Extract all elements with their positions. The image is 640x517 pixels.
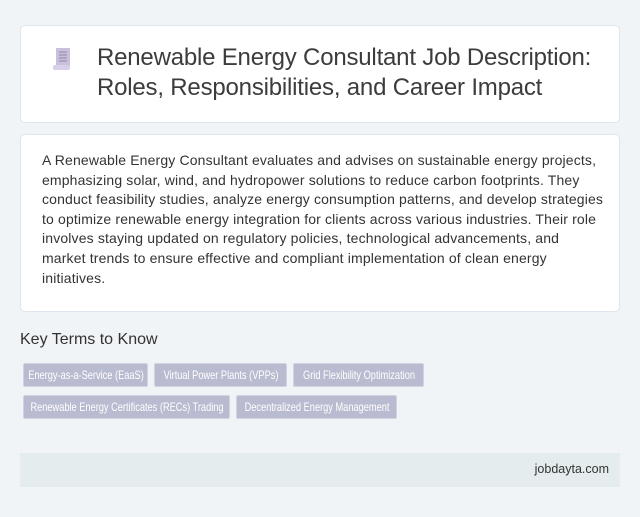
text: Grid Flexibility Optimization	[303, 368, 414, 382]
title: Renewable Energy Consultant Job Description:	[97, 44, 591, 71]
text: Decentralized Energy Management	[244, 400, 389, 414]
footer: jobdayta.com	[535, 462, 609, 476]
text: Renewable Energy Certificates (RECs) Trading	[30, 400, 223, 414]
heading: key terms: Key Terms to Know	[20, 331, 158, 348]
icon: document	[53, 48, 70, 70]
text: Energy-as-a-Service (EaaS)	[28, 368, 143, 382]
header card	[20, 25, 620, 123]
footer	[20, 453, 620, 487]
text: Virtual Power Plants (VPPs)	[163, 368, 278, 382]
description card	[20, 134, 620, 312]
description text: A Renewable Energy Consultant evaluates and advises on sustainable energy projects, emphasizing solar, wind, and hydropower solutions to reduce carbon footprints. They conduct feasibility studies, analyze energy consumption patterns, and develop strategies to optimize renewable energy integration for clients across various industries. Their role involves staying updated on regulatory policies, technological advancements, and market trends to ensure effective and compliant implementation of clean energy initiatives.	[42, 152, 603, 286]
tags	[23, 363, 424, 419]
title	[97, 44, 591, 101]
title: Roles, Responsibilities, and Career Impact	[97, 74, 542, 101]
